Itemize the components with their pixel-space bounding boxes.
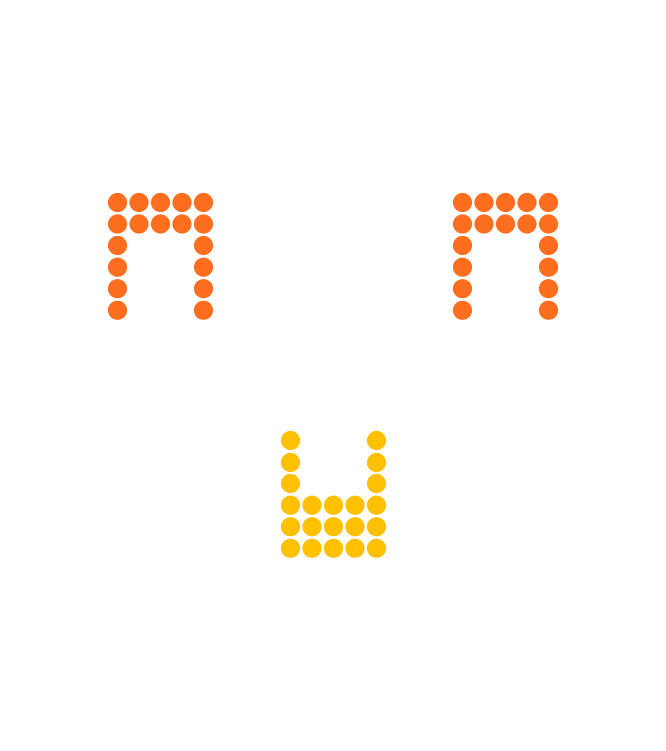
dot shape: bottom yellow cup [281, 431, 386, 558]
dot shape: left orange arch [108, 193, 213, 320]
dot shape: right orange arch [453, 193, 558, 320]
